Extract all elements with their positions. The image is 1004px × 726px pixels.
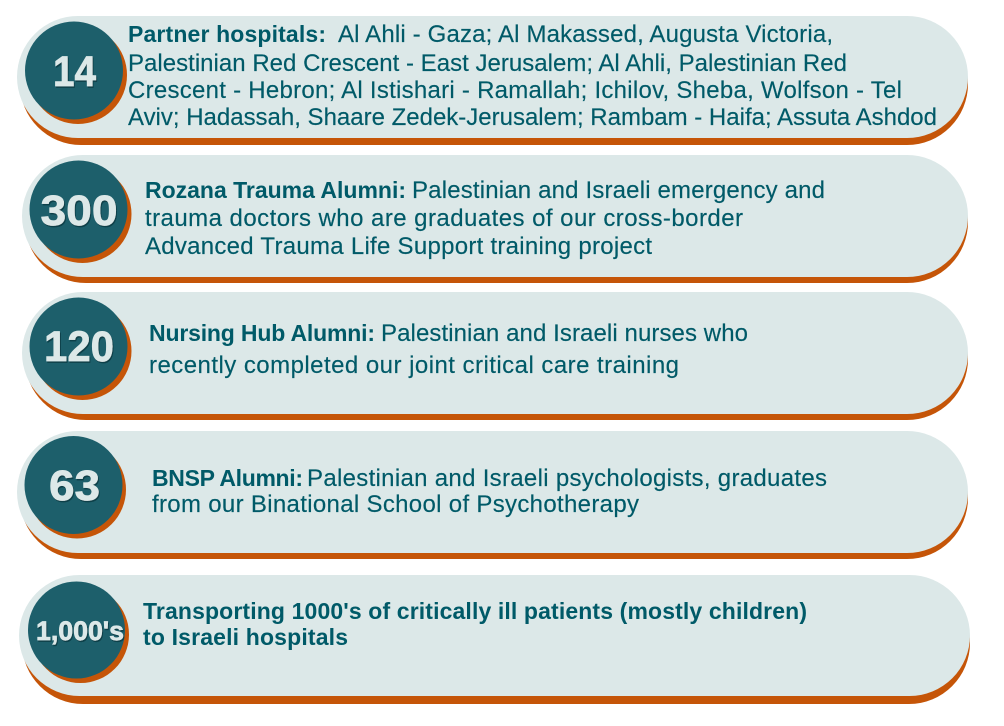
icon: number badge 1,000's [28, 582, 129, 683]
text: BNSP description: Palestinian and Israeli psychologists, graduates [307, 465, 827, 492]
text: partner hospitals description [128, 21, 937, 131]
icon: number badge 120: 120 [44, 323, 114, 371]
text: nursing hub description [149, 320, 748, 379]
text: patient transport description: Transporting 1000's of critically ill patients (mostly children) [143, 598, 807, 624]
text: BNSP description: from our Binational School of Psychotherapy [152, 491, 639, 518]
panel: partner hospitals [17, 16, 968, 145]
text: trauma alumni description: Advanced Trauma Life Support training project [145, 233, 652, 260]
icon: number badge 1,000's: 1,000's [36, 616, 124, 646]
icon: number badge 300: 300 [40, 187, 118, 235]
text: BNSP description [152, 465, 827, 518]
panel: BNSP alumni [17, 431, 968, 559]
text: nursing hub description: Nursing Hub Alumni: [149, 320, 375, 346]
text: trauma alumni description: trauma doctors who are graduates of our cross-border [145, 205, 743, 232]
text: partner hospitals description: Palestinian Red Crescent - East Jerusalem; Al Ahli, Palestinian Red [128, 50, 847, 77]
icon: number badge 63: 63 [49, 462, 100, 510]
panel: Rozana trauma alumni [22, 155, 968, 283]
panel: patient transport [19, 575, 970, 704]
icon: number badge 14: 14 [53, 48, 96, 96]
text: partner hospitals description: Partner hospitals: [128, 21, 326, 47]
text: BNSP description: BNSP Alumni: [152, 465, 303, 491]
text: nursing hub description: recently completed our joint critical care training [149, 352, 679, 379]
text: trauma alumni description: Rozana Trauma Alumni: [145, 177, 406, 203]
text: partner hospitals description: Crescent - Hebron; Al Istishari - Ramallah; Ichilov, Sheba, Wolfson - Tel [128, 77, 902, 104]
text: partner hospitals description: Al Ahli - Gaza; Al Makassed, Augusta Victoria, [338, 21, 833, 48]
text: partner hospitals description: Aviv; Hadassah, Shaare Zedek-Jerusalem; Rambam - Haifa; Assuta Ashdod [128, 104, 937, 131]
panel: nursing hub alumni [22, 292, 968, 420]
icon: number badge 14 [25, 22, 127, 124]
text: nursing hub description: Palestinian and Israeli nurses who [381, 320, 748, 347]
text: trauma alumni description [145, 177, 825, 260]
icon: number badge 63 [24, 436, 126, 538]
icon: number badge 300 [30, 160, 132, 263]
text: trauma alumni description: Palestinian and Israeli emergency and [412, 177, 825, 204]
icon: number badge 120 [30, 298, 132, 400]
text: patient transport description: to Israeli hospitals [143, 624, 348, 650]
text: patient transport description [143, 598, 807, 650]
